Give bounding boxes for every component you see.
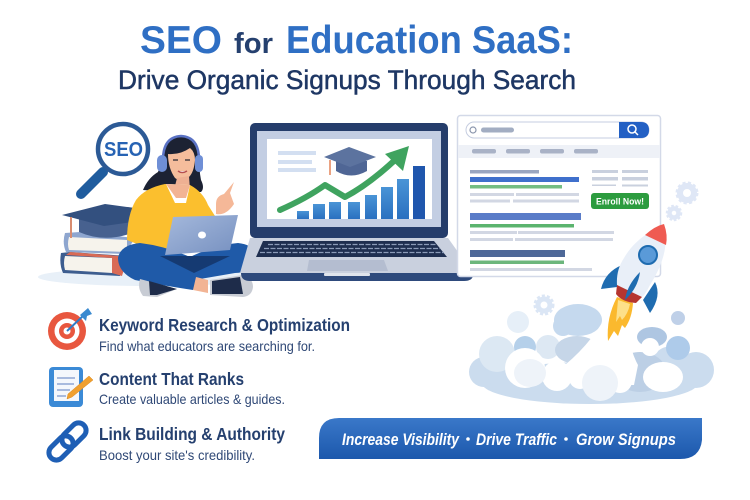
rocket — [601, 224, 667, 341]
hair — [143, 137, 203, 192]
screen content — [267, 139, 432, 219]
banner: Grow Signups — [576, 430, 676, 449]
body — [617, 225, 666, 297]
icon: gears — [535, 183, 697, 314]
icon: document and pencil — [49, 367, 93, 407]
legs — [118, 243, 256, 290]
title: SEO — [140, 19, 222, 62]
nose — [645, 224, 667, 245]
growth arrow — [280, 146, 409, 210]
sweater — [127, 184, 215, 253]
sidebar lines — [592, 170, 648, 186]
title: Education SaaS: — [286, 19, 573, 62]
hand — [216, 182, 234, 214]
person — [118, 136, 256, 297]
item: content: Create valuable articles & guides. — [99, 391, 285, 407]
result 1 — [470, 170, 579, 202]
ground shadow — [38, 268, 262, 286]
result 2 — [470, 213, 614, 241]
feature list — [46, 308, 350, 463]
item: links: Boost your site's credibility. — [99, 447, 255, 463]
enroll button: Enroll Now! — [596, 196, 644, 208]
icon: target — [48, 308, 92, 350]
icon: SEO magnifier: SEO — [104, 139, 143, 161]
item: content — [49, 367, 285, 407]
nozzle — [616, 285, 642, 303]
title: for — [234, 28, 273, 60]
icon: chain link — [46, 420, 89, 463]
fins — [601, 265, 622, 289]
graduation cap — [324, 147, 376, 176]
item: links: Link Building & Authority — [99, 424, 285, 444]
item: keyword research — [48, 308, 350, 354]
flame — [608, 297, 633, 341]
subtitle: Drive Organic Signups Through Search — [118, 65, 576, 95]
face — [168, 148, 195, 180]
search results browser — [458, 116, 660, 276]
result 3 — [470, 250, 592, 271]
item: content: Content That Ranks — [99, 369, 244, 389]
title — [140, 19, 573, 62]
item: links — [46, 420, 285, 463]
icon: SEO magnifier — [81, 124, 148, 194]
item: keyword research: Find what educators are searching for. — [99, 338, 315, 354]
enroll button — [591, 193, 649, 209]
central laptop — [240, 123, 473, 281]
text lines — [278, 151, 316, 155]
smoke cloud — [469, 304, 714, 404]
item: keyword research: Keyword Research & Optimization — [99, 315, 350, 335]
small laptop — [165, 215, 238, 255]
shoes — [139, 279, 177, 297]
headphones — [163, 136, 199, 160]
window — [639, 246, 657, 264]
banner: Drive Traffic — [476, 430, 557, 449]
bar chart — [297, 166, 425, 219]
banner — [319, 418, 702, 459]
books and graduation cap — [60, 204, 135, 276]
banner: Increase Visibility — [342, 430, 460, 449]
center fin — [625, 272, 640, 300]
search bar — [466, 122, 649, 138]
